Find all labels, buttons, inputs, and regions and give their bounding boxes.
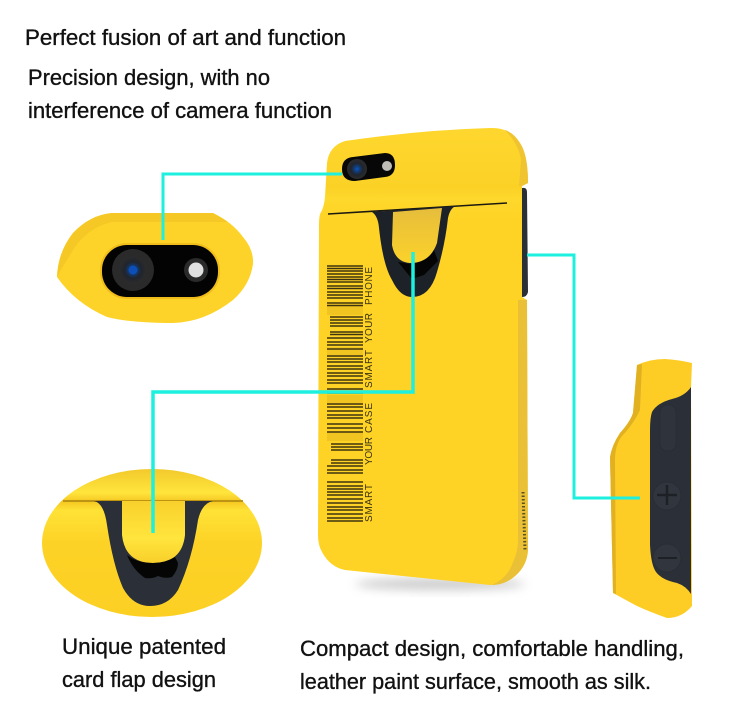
connector: card flap [153, 252, 413, 533]
text: card flap caption: card flap design [62, 667, 216, 692]
phone case [318, 128, 528, 590]
text: card flap caption: Unique patented [62, 634, 226, 659]
inset: side buttons close-up [610, 359, 692, 618]
inset: card flap close-up [42, 469, 262, 617]
title: perfect fusion: Perfect fusion of art and function [25, 25, 346, 50]
card slit [328, 203, 507, 214]
text: compact design caption [300, 636, 684, 694]
card flap U cutout [372, 206, 456, 297]
phone vertical print: SMART [364, 350, 375, 388]
text: precision design: interference of camera function [28, 98, 332, 123]
phone vertical print: SMART [364, 484, 375, 522]
barcode [327, 266, 363, 521]
phone vertical print: YOUR [364, 437, 375, 465]
text: compact design caption: leather paint surface, smooth as silk. [300, 669, 651, 694]
side fine print [523, 492, 525, 550]
phone vertical print [364, 267, 375, 522]
text: card flap caption [62, 634, 226, 692]
volume up button [653, 482, 681, 510]
connector: camera [163, 174, 342, 240]
camera cutout [342, 153, 395, 181]
text: compact design caption: Compact design, comfortable handling, [300, 636, 684, 661]
text: precision design: Precision design, with no [28, 65, 270, 90]
phone vertical print: PHONE [364, 267, 375, 305]
connector: side buttons [527, 255, 640, 498]
volume down button [653, 544, 681, 572]
phone vertical print: CASE [364, 403, 375, 433]
inset: camera close-up [57, 213, 253, 323]
phone vertical print: YOUR [364, 313, 375, 343]
text: precision design [28, 65, 332, 123]
power button [660, 405, 676, 451]
